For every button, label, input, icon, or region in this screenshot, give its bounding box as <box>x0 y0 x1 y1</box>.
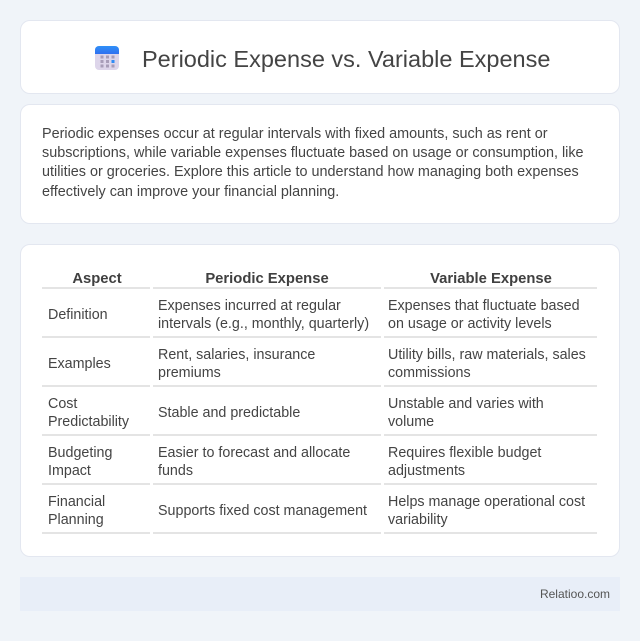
comparison table: Stable and predictable <box>158 405 300 421</box>
intro text: effectively can improve your financial planning. <box>42 184 339 200</box>
comparison table: Impact <box>48 463 91 479</box>
comparison table: Cost <box>48 396 77 412</box>
comparison table: variability <box>388 512 448 528</box>
comparison table: premiums <box>158 365 221 381</box>
comparison table: Unstable and varies with <box>388 396 544 412</box>
comparison table: Supports fixed cost management <box>158 503 367 519</box>
comparison table: Expenses that fluctuate based <box>388 298 580 314</box>
comparison table: Financial <box>48 494 105 510</box>
comparison table: volume <box>388 414 434 430</box>
footer bar <box>20 577 620 611</box>
comparison table: Variable Expense <box>430 270 552 286</box>
comparison table: intervals (e.g., monthly, quarterly) <box>158 316 369 332</box>
intro text: Periodic expenses occur at regular intervals with fixed amounts, such as rent or <box>42 126 548 142</box>
comparison table: Rent, salaries, insurance <box>158 347 315 363</box>
comparison table: funds <box>158 463 193 479</box>
icon: calendar <box>95 46 119 70</box>
footer text: Relatioo.com <box>540 587 610 601</box>
comparison table: Planning <box>48 512 104 528</box>
comparison table <box>42 270 597 534</box>
table card <box>20 244 620 557</box>
comparison table: Examples <box>48 356 111 372</box>
comparison table: Easier to forecast and allocate <box>158 445 350 461</box>
comparison table: Utility bills, raw materials, sales <box>388 347 586 363</box>
intro text: subscriptions, while variable expenses fluctuate based on usage or consumption, like <box>42 145 584 161</box>
comparison table: Predictability <box>48 414 129 430</box>
comparison table: on usage or activity levels <box>388 316 552 332</box>
comparison table: Expenses incurred at regular <box>158 298 341 314</box>
header card <box>20 20 620 94</box>
intro text: utilities or groceries. Explore this article to understand how managing both expenses <box>42 164 579 180</box>
title: Periodic Expense vs. Variable Expense <box>142 46 550 72</box>
comparison table: adjustments <box>388 463 465 479</box>
intro text <box>42 126 584 200</box>
comparison table: Requires flexible budget <box>388 445 541 461</box>
comparison table: Aspect <box>72 270 122 286</box>
comparison table: Definition <box>48 307 108 323</box>
comparison table: Periodic Expense <box>205 270 329 286</box>
intro card <box>20 104 620 224</box>
comparison table: Helps manage operational cost <box>388 494 585 510</box>
comparison table: Budgeting <box>48 445 112 461</box>
comparison table: commissions <box>388 365 471 381</box>
